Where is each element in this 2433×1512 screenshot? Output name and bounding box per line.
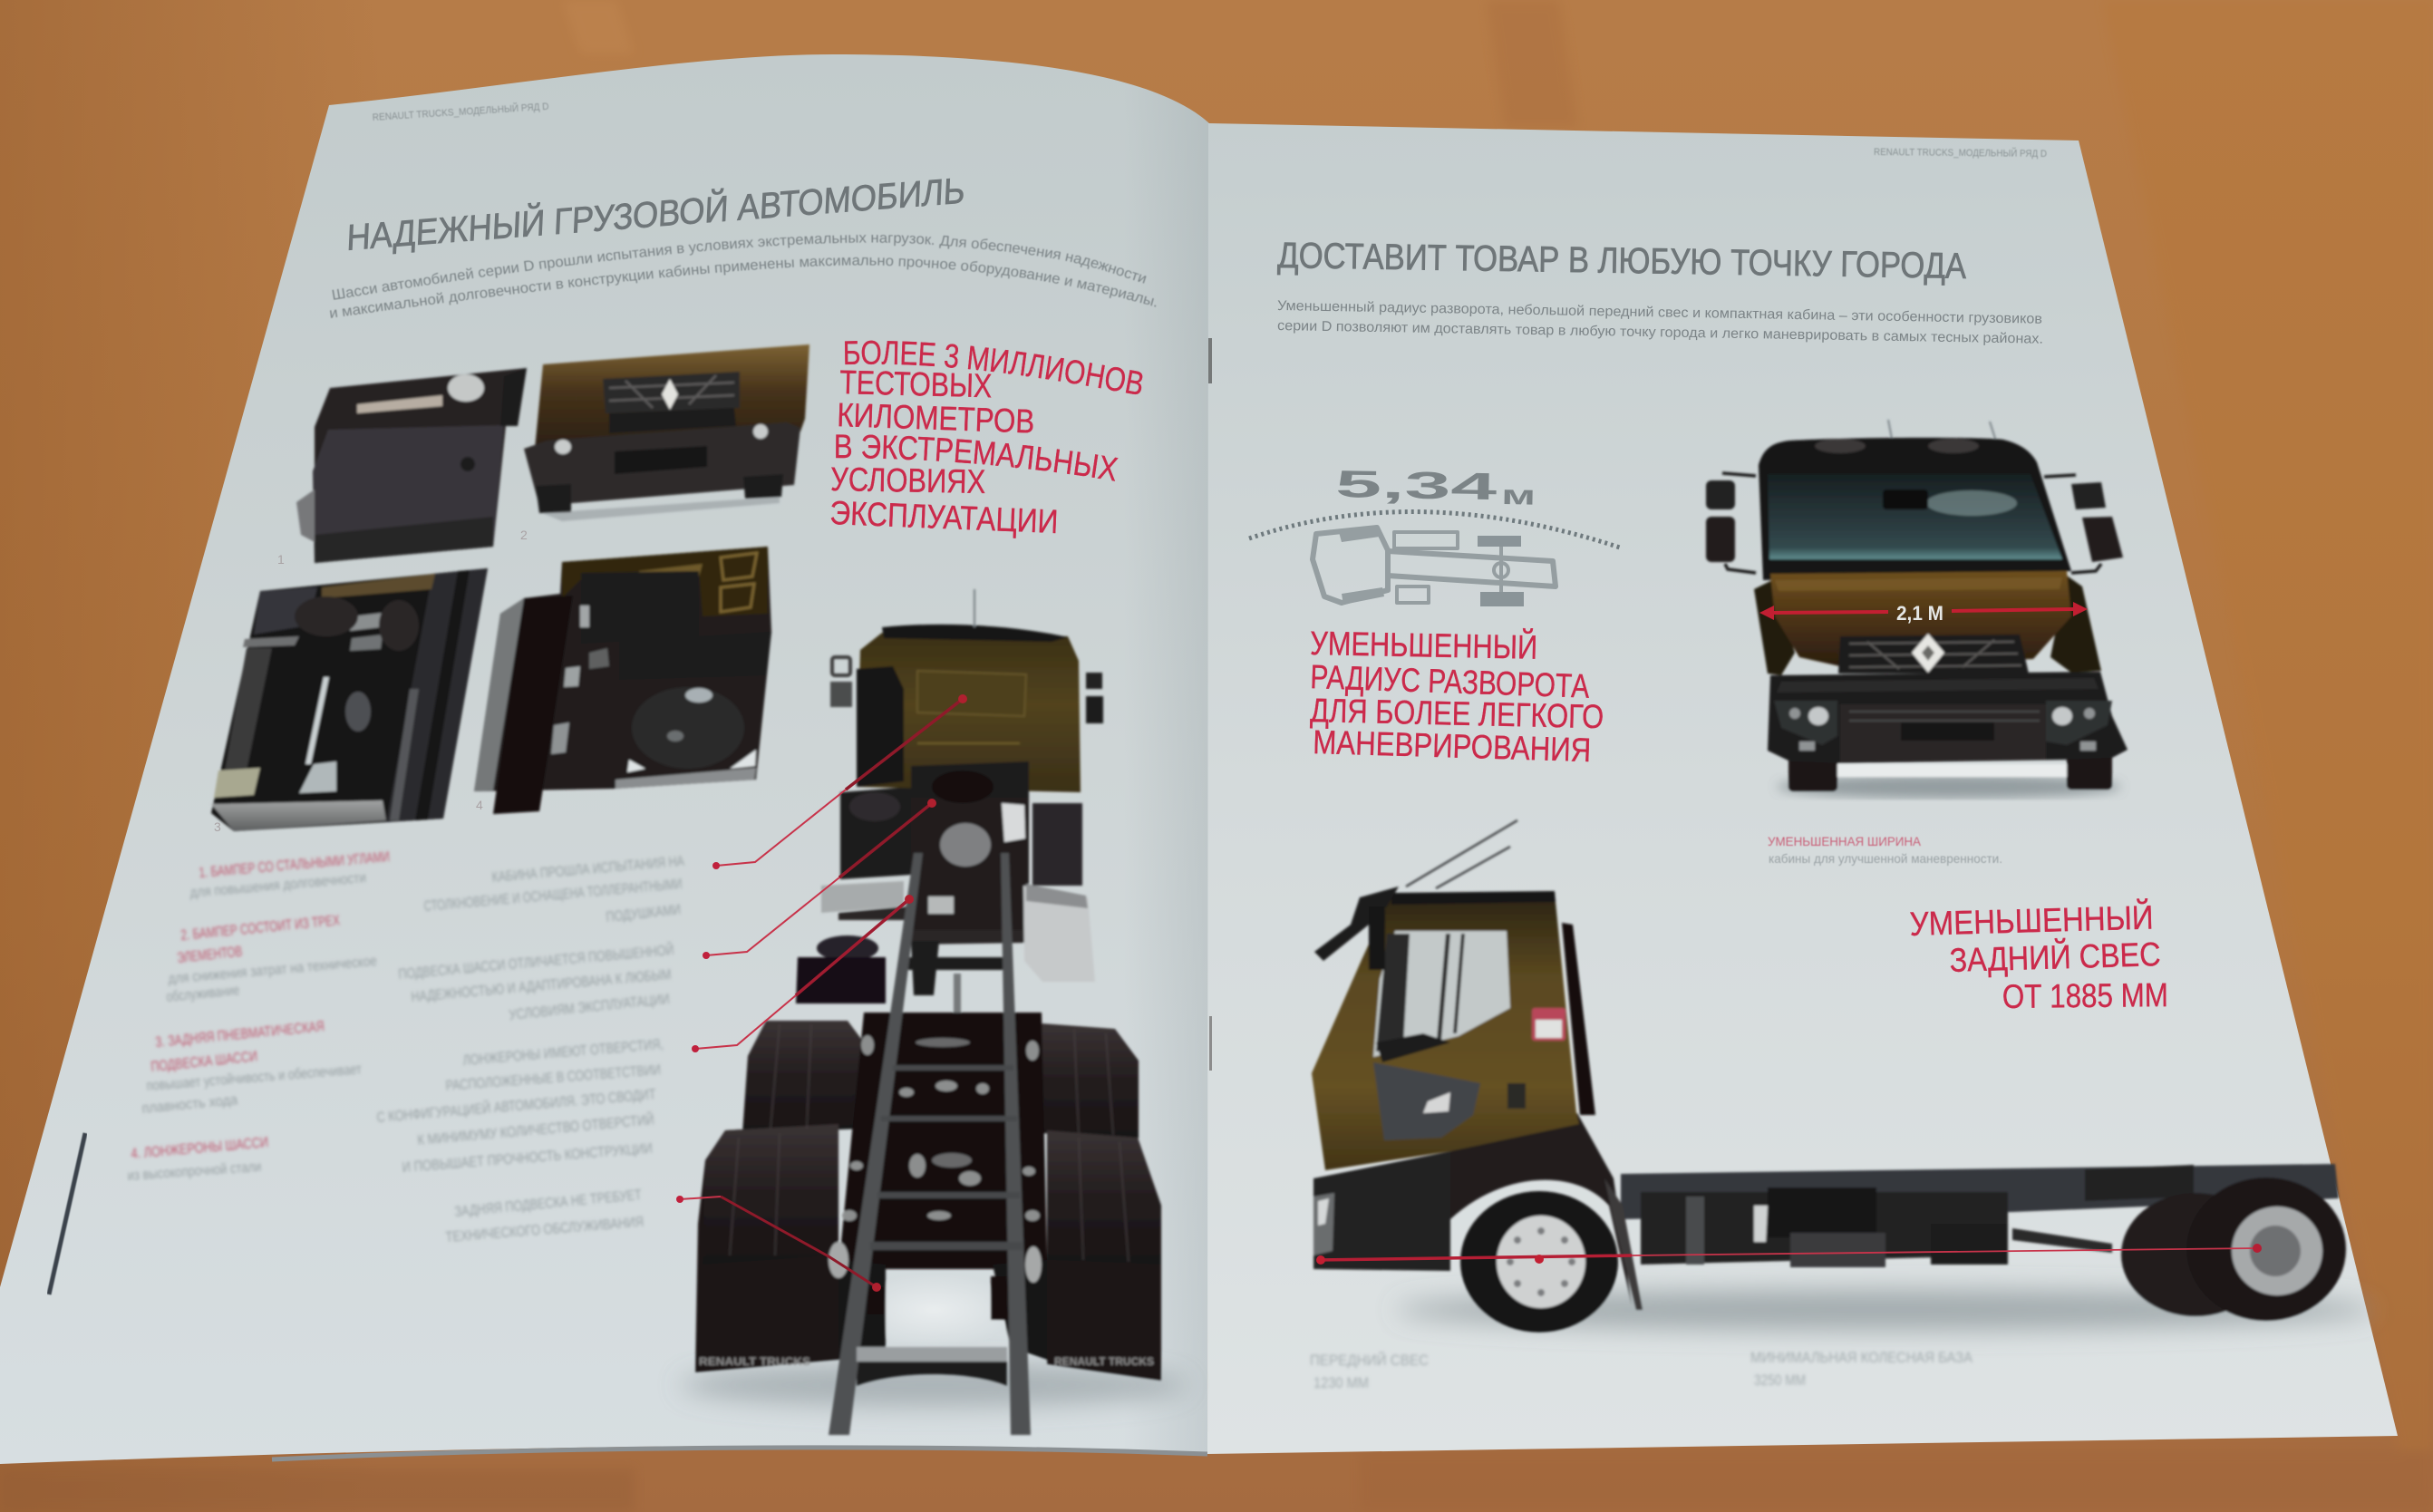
annotation 2: three-part bumper: обслуживание	[166, 983, 240, 1005]
annotation 2: three-part bumper: для снижения затрат на техническое	[168, 954, 378, 987]
annotation 4: chassis rails	[127, 1135, 269, 1184]
right page intro text: Уменьшенный радиус разворота, небольшой передний свес и компактная кабина – эти особенности грузовиков	[1277, 298, 2042, 327]
door sticker	[1532, 1008, 1565, 1041]
chassis frame	[1621, 1164, 2339, 1219]
right page running header: RENAULT TRUCKS_МОДЕЛЬНЫЙ РЯД D	[1874, 146, 2047, 160]
panel: numbered bumper and chassis annotations	[127, 849, 391, 1184]
red callout: test kilometres: ЭКСПЛУАТАЦИИ	[829, 494, 1059, 540]
panel: right brochure page	[1207, 123, 2398, 1454]
white glow on page behind chassis	[852, 1274, 1015, 1346]
headlights	[1774, 701, 1837, 745]
rear wheels	[2121, 1193, 2270, 1316]
side step	[821, 881, 904, 913]
description: rear suspension: ТЕХНИЧЕСКОГО ОБСЛУЖИВАНИЯ	[445, 1215, 645, 1245]
leader line: chassis rail	[692, 895, 914, 1052]
red callout: turning radius: РАДИУС РАЗВОРОТА	[1310, 658, 1590, 705]
right page intro text	[1277, 298, 2043, 347]
description: cab: ПОДУШКАМИ	[606, 902, 682, 926]
annotation 3: rear air suspension: ПОДВЕСКА ШАССИ	[150, 1049, 258, 1075]
grille	[1838, 635, 2029, 674]
width dimension arrow: 2,1 М	[1896, 602, 1943, 625]
annotation 1: steel-corner bumper: для повышения долговечности	[189, 870, 367, 901]
frame rails	[829, 853, 923, 1435]
photo number 4: 4	[476, 798, 483, 812]
leader line: cab	[712, 694, 967, 869]
rear exhaust stack	[1562, 923, 1595, 1115]
photo number 1: 1	[277, 552, 285, 567]
leader line: suspension	[703, 799, 936, 959]
annotation 4: chassis rails: из высокопрочной стали	[127, 1159, 262, 1184]
panel: left brochure page	[0, 54, 1211, 1464]
description: rails	[376, 1037, 664, 1176]
panel: chassis feature descriptions	[376, 854, 685, 1245]
description: rear suspension	[445, 1187, 645, 1245]
turning radius value	[1335, 462, 1536, 511]
left page intro text: Шасси автомобилей серии D прошли испытания в условиях экстремальных нагрузок. Для обеспечения надежности	[332, 234, 1147, 301]
red callout: rear overhang: УМЕНЬШЕННЫЙ	[1909, 898, 2154, 943]
front overhang spec: ПЕРЕДНИЙ СВЕС	[1310, 1352, 1429, 1369]
roof strip	[1391, 891, 1556, 905]
annotation 1: steel-corner bumper: 1. БАМПЕР СО СТАЛЬНЫМИ УГЛАМИ	[199, 849, 391, 881]
wheel arch	[1450, 1113, 1632, 1305]
wheelbase red reference line	[1316, 1244, 2262, 1265]
annotation 3: rear air suspension: 3. ЗАДНЯЯ ПНЕВМАТИЧЕСКАЯ	[155, 1019, 325, 1051]
front overhang spec: 1230 ММ	[1313, 1374, 1369, 1391]
red callout: test kilometres: БОЛЕЕ 3 МИЛЛИОНОВ	[845, 341, 1142, 395]
red callout: test kilometres: В ЭКСТРЕМАЛЬНЫХ	[836, 434, 1119, 481]
photo 4: chassis frame and tank	[474, 547, 771, 814]
battery box	[817, 935, 878, 961]
hood	[1770, 571, 2071, 666]
annotation 1: steel-corner bumper	[189, 849, 391, 901]
annotation 3: rear air suspension: плавность хода	[141, 1092, 238, 1117]
icon: truck chassis plan view	[1313, 528, 1556, 606]
cab rear	[857, 633, 1081, 792]
left page intro text second line: и максимальной долговечности в конструкции кабины применены максимально прочное оборудование и материалы.	[330, 257, 1157, 319]
width dimension arrow	[1759, 602, 2088, 625]
antenna	[974, 589, 975, 627]
dotted turning arc	[1249, 512, 1623, 548]
description: cab: СТОЛКНОВЕНИЕ И ОСНАЩЕНА ТОЛЛЕРАНТНЫМИ	[423, 877, 683, 915]
description: rails: ЛОНЖЕРОНЫ ИМЕЮТ ОТВЕРСТИЯ,	[462, 1037, 664, 1069]
photo number 2: 2	[520, 528, 528, 542]
mudflap brand text: RENAULT TRUCKS	[699, 1355, 810, 1368]
mirrors	[1314, 887, 1399, 961]
lower door glass	[1373, 1062, 1480, 1140]
caption: reduced cab width	[1768, 834, 2002, 866]
truck front view photo	[1706, 420, 2128, 799]
description: suspension: УСЛОВИЯМ ЭКСПЛУАТАЦИИ	[509, 992, 670, 1023]
ground shadow	[1396, 1290, 2375, 1330]
annotation 3: rear air suspension	[141, 1019, 363, 1117]
photo 2: truck front bumper	[524, 344, 809, 521]
side window	[1373, 931, 1510, 1057]
wheelbase spec: 3250 ММ	[1754, 1371, 1806, 1389]
caption: reduced cab width: кабины для улучшенной маневренности.	[1769, 851, 2002, 866]
door handle	[1507, 1083, 1526, 1109]
chassis photo: truck seen from behind: RENAULT TRUCKS	[1054, 1355, 1154, 1368]
mudguard tail	[1604, 1178, 1643, 1310]
description: rear suspension: ЗАДНЯЯ ПОДВЕСКА НЕ ТРЕБУЕТ	[454, 1187, 643, 1220]
right page intro text: серии D позволяют им доставлять товар в любую точку города и легко маневрировать в самых тесных районах.	[1277, 318, 2043, 347]
hood side panels	[1754, 580, 1795, 675]
annotation 4: chassis rails: 4. ЛОНЖЕРОНЫ ШАССИ	[131, 1135, 269, 1162]
front wheel	[1460, 1191, 1618, 1333]
chassis photo: truck seen from behind	[680, 589, 1187, 1435]
silver exhaust tank	[1023, 886, 1095, 982]
red callout: test kilometres	[829, 341, 1142, 540]
red callout: rear overhang: ОТ 1885 ММ	[2002, 976, 2168, 1015]
annotation 2: three-part bumper	[166, 913, 378, 1005]
right page heading: ДОСТАВИТ ТОВАР В ЛЮБУЮ ТОЧКУ ГОРОДА	[1277, 236, 1967, 286]
wheelbase spec	[1750, 1349, 1973, 1389]
red callout: turning radius: УМЕНЬШЕННЫЙ	[1310, 624, 1538, 666]
lower bumper	[1768, 672, 2128, 763]
truck side view photo	[1312, 820, 2375, 1333]
description: rails: РАСПОЛОЖЕННЫЕ В СООТВЕТСТВИИ	[445, 1062, 662, 1094]
red callout: turning radius: ДЛЯ БОЛЕЕ ЛЕГКОГО	[1310, 692, 1604, 735]
turning radius value: 5,34	[1335, 462, 1498, 508]
turning radius value: м	[1501, 480, 1536, 511]
description: suspension	[398, 941, 674, 1023]
red callout: test kilometres: КИЛОМЕТРОВ	[837, 396, 1035, 441]
red callout: rear overhang: ЗАДНИЙ СВЕС	[1949, 935, 2161, 979]
under-cab blocks	[840, 787, 911, 879]
shadow	[1777, 775, 2121, 799]
description: cab: КАБИНА ПРОШЛА ИСПЫТАНИЯ НА	[491, 854, 685, 886]
windscreen	[1768, 474, 2062, 559]
wheels	[1788, 752, 1837, 791]
front bumper and step	[1313, 1151, 1450, 1271]
mirrors and arms	[1722, 473, 2101, 573]
rear tyres	[695, 1021, 1161, 1381]
description: rails: С КОНФИГУРАЦИЕЙ АВТОМОБИЛЯ. ЭТО СВОДИТ	[376, 1085, 656, 1126]
cab frame	[1759, 438, 2071, 580]
red callout: turning radius	[1310, 624, 1604, 769]
photo number 3: 3	[214, 819, 221, 834]
photo 3: rear air suspension	[211, 568, 488, 831]
photo 1: bumper corner	[296, 368, 527, 563]
antennas	[1888, 420, 1997, 444]
antennas	[1406, 820, 1517, 888]
logo	[1912, 634, 1944, 673]
description: cab	[423, 854, 685, 926]
description: suspension: НАДЕЖНОСТЬЮ И АДАПТИРОВАНА К ЛЮБЫМ	[411, 967, 672, 1005]
ground shadow	[680, 1363, 1187, 1407]
front overhang spec	[1310, 1352, 1429, 1391]
decorative dark bar on left page edge	[49, 1133, 85, 1294]
annotation 3: rear air suspension: повышает устойчивость и обеспечивает	[146, 1061, 363, 1094]
cab body	[1312, 893, 1579, 1170]
wheelbase spec: МИНИМАЛЬНАЯ КОЛЕСНАЯ БАЗА	[1750, 1349, 1973, 1366]
annotation 2: three-part bumper: 2. БАМПЕР СОСТОИТ ИЗ ТРЕХ	[180, 913, 341, 944]
description: suspension: ПОДВЕСКА ШАССИ ОТЛИЧАЕТСЯ ПОВЫШЕННОЙ	[398, 941, 674, 983]
left page running header: RENAULT TRUCKS_МОДЕЛЬНЫЙ РЯД D	[372, 101, 549, 123]
left page heading: НАДЕЖНЫЙ ГРУЗОВОЙ АВТОМОБИЛЬ	[346, 169, 966, 258]
leader line: rear suspension	[676, 1196, 881, 1292]
caption: reduced cab width: УМЕНЬШЕННАЯ ШИРИНА	[1768, 834, 1922, 848]
red callout: rear overhang	[1909, 898, 2168, 1015]
white gap between wheels	[1837, 764, 2067, 777]
mirrors	[832, 657, 850, 675]
red callout: test kilometres: УСЛОВИЯХ	[830, 460, 986, 500]
forward frame and engine	[911, 760, 1029, 930]
red callout: test kilometres: ТЕСТОВЫХ	[839, 363, 993, 404]
rear machinery	[838, 1013, 1047, 1269]
red callout: turning radius: МАНЕВРИРОВАНИЯ	[1313, 723, 1592, 769]
description: rails: И ПОВЫШАЕТ ПРОЧНОСТЬ КОНСТРУКЦИИ	[402, 1141, 653, 1176]
annotation 2: three-part bumper: ЭЛЕМЕНТОВ	[177, 945, 243, 966]
description: rails: К МИНИМУМУ КОЛИЧЕСТВО ОТВЕРСТИЙ	[417, 1110, 654, 1149]
